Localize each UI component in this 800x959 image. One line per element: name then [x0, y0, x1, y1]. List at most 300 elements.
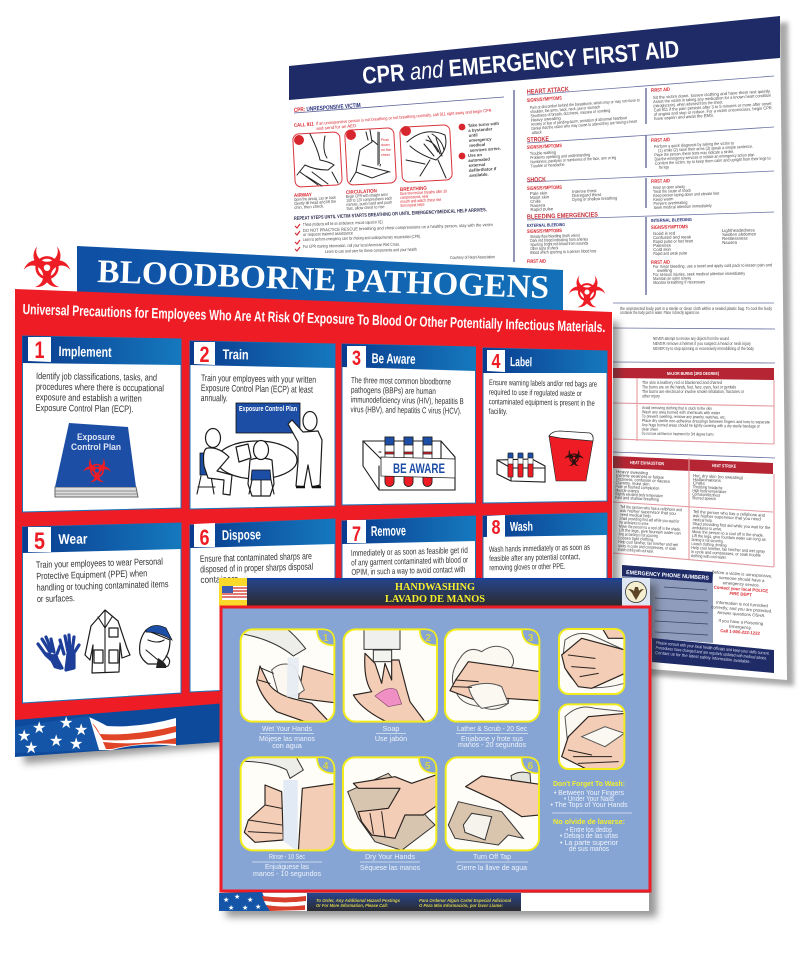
- poster: bloodborne pathogens: [15, 240, 619, 764]
- text: wash: removing gloves or other PPE.: [489, 562, 565, 572]
- table: heat exhaustion and heat stroke: Help cool him/her, fan him/her and wet: [618, 539, 679, 547]
- section: bleeding emergencies: Lightheadedness: [722, 227, 755, 233]
- step 2: soap: [344, 627, 437, 723]
- step captions: 100 to 120 compressions each: [346, 196, 393, 203]
- step captions: AIRWAY: [294, 192, 313, 199]
- table: heat exhaustion and heat stroke: [613, 456, 774, 567]
- section: bleeding emergencies: SIGNS/SYMPTOMS: [651, 224, 689, 231]
- section: heart attack: shoulder, the arms, back, neck, jaw or stomach: [530, 104, 601, 114]
- footer flag: ★: [74, 720, 88, 739]
- section: stroke: Place the person, these tests may indicate a stroke.: [654, 149, 734, 157]
- section: shock: Pale skin: [530, 190, 548, 196]
- text: implement: procedures where there is occupational: [36, 381, 164, 393]
- text: implement: Exposure Control Plan (ECP).: [36, 402, 134, 414]
- footer band: Please consult with your local health officials and keep your skills current.: [656, 640, 770, 656]
- section: stroke: Trouble or headache: [530, 162, 565, 169]
- step captions: CIRCULATION: [346, 188, 377, 196]
- section: stroke: Problems speaking and understanding: [530, 152, 591, 160]
- card 5: wear: Wear: [58, 530, 88, 547]
- captions row 1: con agua: [272, 741, 302, 750]
- icon: training meeting: Exposure Control Plan: [239, 406, 297, 413]
- captions row 1: Mójese las manos: [259, 734, 315, 743]
- captions row 1: [259, 724, 528, 750]
- side image: between the fingers: [559, 627, 626, 694]
- table: heat exhaustion and heat stroke: Loosen clothing, drinking.: [691, 541, 727, 548]
- section: bleeding emergencies: NEVER attempt to remove any objects from the wound: [653, 336, 729, 341]
- table: heat exhaustion and heat stroke: Slightly elevated body temperature: [615, 491, 664, 498]
- section: heart attack: attack: [531, 129, 543, 135]
- section: stroke: Numbness, paralysis or numbness of the face, arm or leg: [530, 155, 617, 164]
- captions row 2: Dry Your Hands: [365, 852, 415, 861]
- emergency notes: someone should have a: [719, 575, 765, 583]
- section: shock: Disregard thirst: [572, 192, 602, 198]
- table: heat exhaustion and heat stroke: trouble clothing with cool water.: [618, 547, 654, 554]
- table: major burns: The skin is leathery red or blackened and charred: [642, 380, 723, 385]
- section: bleeding emergencies: BLEEDING EMERGENCIES: [527, 212, 599, 221]
- card 7: remove: 7: [352, 523, 361, 546]
- section: shock: Seek medical attention immediately: [654, 203, 712, 210]
- icon: US flag on yellow: [219, 578, 247, 606]
- reminder list: • The Tops of Your Hands: [550, 800, 628, 809]
- section: bleeding emergencies: INTERNAL BLEEDING: [651, 217, 693, 223]
- section: stroke: Dial the emergency services or initiate an emergency action plan: [654, 152, 755, 162]
- section: bleeding emergencies: Swollen abdomen: [722, 231, 757, 237]
- card 6: dispose: [190, 519, 335, 692]
- text: label: required to use if regulated waste or: [489, 388, 582, 398]
- section: shock: Keep warm: [653, 196, 674, 202]
- text: wash: feasible after any potential contact,: [489, 552, 580, 563]
- text: be aware: immunodeficiency virus (HIV), hepatitis B: [351, 394, 464, 406]
- captions row 1: Use jabón: [375, 734, 407, 743]
- section: CPR unresponsive victim: [293, 97, 504, 260]
- step 1: wet your hands: [238, 627, 334, 723]
- section: stroke: STROKE: [527, 136, 550, 144]
- text: implement: [36, 370, 164, 415]
- section: heart attack: [527, 86, 773, 135]
- section: bleeding emergencies: Restlessness: [722, 236, 748, 241]
- table: heat exhaustion and heat stroke: Fast and shallow breathing: [615, 495, 660, 502]
- main panel: [221, 607, 650, 891]
- section: heart attack: Pain or discomfort behind the breastbone, which may or may not move to: [530, 97, 640, 110]
- text: remove: [351, 545, 469, 577]
- step 4: rinse: 4: [323, 761, 329, 772]
- reminder list: • Debajo de las uñas: [560, 831, 618, 840]
- repeat steps note: or request trained assistance: [303, 230, 354, 237]
- table: heat exhaustion and heat stroke: Chills: [693, 480, 705, 486]
- emergency notes: correctly, and you are protected.: [711, 604, 772, 614]
- emergency notes: If you have a Poisoning: [718, 618, 764, 626]
- section: bleeding emergencies: the unprotected body part in a sterile or clean cloth within a sealed plastic bag. To cool the body: [620, 306, 773, 311]
- card 4: label: [483, 348, 607, 503]
- card 1: implement: Implement: [58, 343, 112, 360]
- table: heat exhaustion and heat stroke: Confusion/dizziness: [692, 491, 720, 498]
- table: heat exhaustion and heat stroke: Heavy sweating: [616, 469, 649, 475]
- emergency notes: Answer questions OSHA.: [717, 610, 766, 618]
- section: heart attack: Anxiety or fear of pending doom, sensation of abnormal heartbeat: [531, 115, 628, 127]
- icon: face shield: [140, 625, 172, 668]
- emergency notes: [709, 569, 773, 637]
- footer flag: ★: [49, 731, 63, 750]
- text: remove: OPIM, in such a way to avoid contact with: [351, 564, 466, 577]
- reminder list: • La parte superior: [560, 838, 619, 847]
- icon: lab coat: [85, 610, 130, 673]
- icon: sharps container: [549, 431, 593, 481]
- right side notes: external: [468, 162, 485, 168]
- repeat steps note: REPEAT STEPS UNTIL VICTIM STARTS BREATHING OR UNTIL EMERGENCY/MEDICAL HELP ARRIVES.: [294, 207, 487, 222]
- repeat steps note: [294, 207, 495, 260]
- section: heart attack: Sit the victim down, loosen clothing and have them rest quietly.: [653, 88, 771, 100]
- section: stroke: Perform a quick diagnosis by asking the victim to: [654, 140, 734, 149]
- section: bleeding emergencies: Other signs of shock: [530, 245, 559, 251]
- section: bleeding emergencies: Paleness: [653, 243, 671, 248]
- table: heat exhaustion and heat stroke: ask his/her supervisor that you need: [693, 513, 762, 522]
- step 3: lather and scrub: [445, 629, 540, 722]
- table: heat exhaustion and heat stroke: spray in cycle and compresses, or soak: [618, 543, 677, 551]
- repeat steps note: Learn to perform emergency care for choking and cardiopulmonary resuscitation (CPR).: [303, 234, 421, 242]
- card 1: implement: 1: [34, 337, 44, 364]
- section: stroke: [527, 136, 771, 170]
- footer: O Para Más Información, por favor Llame:: [419, 903, 504, 908]
- table: heat exhaustion and heat stroke: need medical help.: [620, 512, 652, 518]
- emergency phone numbers box: EMERGENCY PHONE NUMBERS: [626, 570, 709, 582]
- right side notes: services arrive.: [469, 146, 501, 153]
- title: HANDWASHING: [395, 581, 475, 593]
- emergency notes: Information is not furnished: [716, 600, 769, 608]
- step captions: chin, then check.: [294, 203, 324, 210]
- table: major burns: Place dry sterile non-adhesive dressings between fingers and toes to separate: [642, 418, 770, 424]
- section: bleeding emergencies: NEVER try to stop spinning or excessively immobilizing of the body: [653, 346, 755, 351]
- table: major burns: Any huge burned areas should be lightly covering with a dry sterile bandage or: [642, 422, 760, 429]
- text: train: Train your employees with your written: [201, 372, 316, 385]
- footer: To Order, Any Additional Hazard Postings: [316, 898, 401, 903]
- section: shock: Prevent overheating: [653, 200, 688, 206]
- table: heat exhaustion and heat stroke: Pale or flushed complexion: [615, 484, 660, 491]
- section: heart attack: have aspirin and await the EMS.: [654, 113, 714, 121]
- card 5: wear: [22, 523, 181, 703]
- section: shock: Rapid pulse: [530, 206, 554, 212]
- step 3: lather and scrub: 3: [528, 633, 534, 644]
- section: shock: Moist skin: [530, 194, 550, 200]
- footer: ★: [242, 904, 248, 912]
- step captions: Gently tilt head and lift the: [294, 199, 337, 206]
- footer flag: ★: [59, 713, 73, 732]
- table: heat exhaustion and heat stroke: Move the person to a cool off in the shade.: [619, 523, 681, 532]
- right side notes: a bystander: [468, 126, 493, 133]
- section: bleeding emergencies: Dark red blood indicating from arteries: [530, 236, 588, 243]
- title band: [289, 16, 780, 100]
- text: train: Exposure Control Plan (ECP) at least: [201, 382, 313, 395]
- section: heart attack: HEART ATTACK: [527, 86, 569, 96]
- emergency notes: Contact your local POLICE: [714, 585, 769, 593]
- captions row 1: Enjabone y frote sus: [461, 734, 523, 743]
- section: CPR unresponsive victim: If an unresponsive person is not breathing or not breathing normally, call 911 right away and begin CPR: [316, 108, 492, 126]
- table: heat exhaustion and heat stroke: Dizziness, confusion or nausea: [616, 476, 670, 484]
- text: label: Ensure warning labels and/or red bags are: [489, 378, 597, 389]
- step 6: turn off tap: [446, 757, 540, 850]
- section: stroke: Trouble walking: [530, 150, 557, 156]
- section: bleeding emergencies: Cold skin: [653, 247, 672, 252]
- footer flag: ★: [69, 734, 83, 753]
- text: dispose: containers.: [200, 573, 241, 585]
- section: CPR unresponsive victim: CALL 911: [294, 121, 314, 129]
- table: heat exhaustion and heat stroke: Slurred speech: [692, 495, 717, 501]
- section: CPR unresponsive victim: and send for an AED: [316, 123, 356, 131]
- section: shock: Keep an open airway: [653, 184, 686, 190]
- top band: [219, 578, 650, 606]
- card 6: dispose: Dispose: [222, 526, 261, 543]
- section: bleeding emergencies: SIGNS/SYMPTOMS: [527, 228, 563, 235]
- right side notes: Take turns with: [468, 121, 500, 128]
- footer band: Procedures have changed and are regularly updated with medical advice.: [655, 645, 767, 661]
- red panel: [15, 289, 612, 721]
- reminder list: de sus manos: [569, 844, 609, 853]
- section: stroke: Comfort the victim, try to keep them calm and upright from their legs to: [655, 156, 771, 166]
- footer flag: [15, 672, 612, 757]
- section: bleeding emergencies: Monitor breathing if necessary: [653, 279, 706, 285]
- section: heart attack: Denial that the victim who may cause to attend they are having a heart: [531, 119, 638, 131]
- section: heart attack: FIRST AID: [651, 87, 670, 94]
- card 3: be aware: [342, 344, 476, 505]
- table: major burns: MAJOR BURNS (3RD DEGREE): [667, 371, 719, 376]
- section: shock: FIRST AID: [651, 178, 670, 185]
- text: be aware: The three most common bloodborne: [351, 375, 451, 387]
- text: dispose: [200, 550, 314, 585]
- table: heat exhaustion and heat stroke: Hot, dry skin (no sweating): [693, 473, 744, 480]
- text: wear: handling or touching contaminated items: [36, 578, 169, 593]
- section: shock: Nausea: [530, 202, 546, 208]
- reminder list: • Under Your Nails: [564, 794, 614, 803]
- table: heat exhaustion and heat stroke: Shad providing first aid while you wait for the: [692, 521, 771, 530]
- section: heart attack: (nitroglycerin), when advised from the sheet.: [653, 99, 723, 108]
- table: heat exhaustion and heat stroke: Lift the legs, give fountain water can long as: [692, 533, 766, 542]
- CPR step panels: Push: [381, 138, 389, 142]
- section: bleeding emergencies: FIRST AID: [527, 259, 546, 265]
- emergency notes: Call 1-800-222-1222: [720, 628, 761, 636]
- table: heat exhaustion and heat stroke: Hallucinations: [693, 477, 721, 483]
- section: bleeding emergencies: [527, 212, 773, 351]
- reminder list: • Entre los dedos: [566, 825, 612, 834]
- card 8: wash: [483, 513, 607, 600]
- card 2: train: 2: [200, 342, 210, 367]
- section: shock: Intense thirst: [572, 188, 597, 194]
- section: bleeding emergencies: EXTERNAL BLEEDING: [527, 222, 565, 228]
- icon: exposure control plan book: [55, 423, 138, 497]
- title: CPR and EMERGENCY FIRST AID: [361, 36, 680, 90]
- section: bleeding emergencies: Steady flow bleeding (both veins): [530, 233, 580, 239]
- card 6: dispose: 6: [200, 525, 210, 550]
- table: heat exhaustion and heat stroke: Muscle cramps: [615, 487, 639, 494]
- top band: LAVADO DE MANOS: [385, 593, 485, 605]
- icon: seal: [622, 578, 650, 606]
- captions row 2: [252, 852, 528, 878]
- section: stroke: SIGNS/SYMPTOMS: [527, 143, 563, 151]
- section: shock: [527, 176, 720, 212]
- table: heat exhaustion and heat stroke: Help cool him/her, fan him/her and wet spray: [691, 545, 766, 554]
- table: major burns: other injury: [642, 394, 661, 398]
- repeat steps note: Learn to use and care for these components and your health: [325, 247, 417, 254]
- card 7: remove: Remove: [371, 522, 406, 539]
- captions row 2: manos - 10 segundos: [253, 869, 321, 878]
- section: bleeding emergencies: Rapid pulse or fast heart: [653, 238, 694, 244]
- table: major burns: The burns are electrical or involve smoke inhalation, fractures or: [642, 389, 744, 394]
- emergency notes: Before a victim is unresponsive,: [712, 569, 772, 579]
- table: major burns: The burns are on the hands, feet, face, eyes, feet or genitals: [642, 384, 736, 390]
- right side notes: Use an: [468, 152, 483, 158]
- table: heat exhaustion and heat stroke: ask his/her supervisor that you: [620, 508, 677, 516]
- table: heat exhaustion and heat stroke: ambulance to arrive.: [692, 525, 722, 532]
- section: shock: SHOCK: [527, 176, 546, 184]
- table: heat exhaustion and heat stroke: Tell the person who has a cellphone and: [693, 509, 766, 518]
- reminder list: Don't Forget To Wash:: [553, 779, 625, 788]
- section: heart attack: SIGNS/SYMPTOMS: [527, 96, 563, 104]
- footer: [219, 892, 649, 912]
- column dividers: [514, 88, 646, 295]
- text: wash: Wash hands immediately or as soon as: [489, 543, 590, 554]
- section: bleeding emergencies: Good is red: [653, 231, 676, 236]
- footer band: [652, 638, 774, 673]
- icon: test tube rack: BE AWARE: [393, 460, 445, 476]
- table: major burns: Avoid removing clothing that is stuck to the skin: [642, 405, 713, 411]
- table: major burns: [613, 368, 774, 444]
- step captions: Give two rescue breaths after 30: [400, 189, 447, 196]
- card 1: implement: [22, 336, 181, 512]
- section: heart attack: Heavy sweating: [531, 115, 561, 123]
- poster: handwashing: [219, 578, 657, 917]
- text: be aware: pathogens (BBPs) are human: [351, 385, 436, 396]
- card 3: be aware: Be Aware: [371, 350, 416, 367]
- section: bleeding emergencies: swelling: [657, 268, 673, 273]
- captions row 1: Soap: [383, 724, 399, 733]
- illustrations row 2: [238, 755, 540, 852]
- section: stroke: the legs: [659, 164, 669, 170]
- table: heat exhaustion and heat stroke: fainting is not occurring.: [691, 537, 724, 544]
- text: wear: or surfaces.: [37, 592, 75, 604]
- section: shock: Dying or shallow breathing: [572, 195, 618, 202]
- card 2: train: [190, 341, 335, 509]
- section: shock: Treat the cause of shock: [653, 188, 692, 194]
- poster: CPR and emergency first aid: [289, 16, 794, 686]
- card 5: wear: 5: [34, 528, 45, 555]
- text: remove: Immediately or as soon as feasible get rid: [351, 545, 468, 558]
- table: heat exhaustion and heat stroke: Shad providing first aid while you wait for: [619, 516, 680, 524]
- text: wear: Train your employees to wear Personal: [36, 555, 163, 570]
- section: heart attack: Call 911 if the pain persists after 3 to 5 minutes or more after onset: [653, 101, 772, 113]
- right side notes: [459, 121, 501, 178]
- icon: test tube rack: [363, 437, 455, 490]
- section: heart attack: Shortness of breath, dizziness, nausea or vomiting: [530, 108, 611, 118]
- section: shock: SIGNS/SYMPTOMS: [527, 185, 563, 192]
- icon: training meeting: [197, 403, 322, 496]
- CPR step panels: down: [381, 143, 390, 147]
- captions row 1: manos - 20 segundos: [458, 740, 526, 749]
- repeat steps note: Courtesy of Heart Association: [450, 254, 495, 260]
- emergency phone numbers box: [622, 565, 713, 643]
- table: heat exhaustion and heat stroke: Loosen tight clothing.: [618, 535, 655, 542]
- reminder list: • Between Your Fingers: [554, 788, 624, 797]
- icon: biohazard left: [22, 240, 72, 287]
- captions row 2: Turn Off Tap: [473, 852, 511, 861]
- section: CPR unresponsive victim: CPR: UNRESPONSIVE VICTIM: [294, 103, 361, 114]
- icon: exposure control plan book: Exposure: [77, 432, 115, 442]
- card 8: wash: 8: [492, 517, 500, 539]
- emergency notes: FIRE DEPT: [729, 591, 752, 597]
- icon: biohazard right: [567, 271, 607, 307]
- section: bleeding emergencies: Nausea: [722, 240, 738, 245]
- footer: ★: [247, 896, 253, 904]
- section: bleeding emergencies: Spurting bright red blood from wounds: [530, 240, 588, 247]
- step 6: turn off tap: 6: [528, 761, 534, 772]
- footer: ★: [228, 904, 234, 912]
- section: bleeding emergencies: For serious injuries, seek medical attention immediately: [653, 271, 746, 277]
- icon: gloves: [38, 635, 79, 670]
- table: major burns: Wash any area burned with chemicals with water: [642, 409, 720, 415]
- text: wash: [489, 543, 590, 572]
- table: major burns: clean sheet: [642, 426, 658, 432]
- captions row 2: Rinse - 10 Sec: [269, 852, 305, 861]
- card 4: label: 4: [492, 351, 501, 373]
- section: bleeding emergencies: For minor bleeding, use a towel and apply cold pack to lessen pain and: [653, 262, 773, 269]
- step 4: rinse: [238, 755, 335, 852]
- captions row 2: Enjuáguese las: [265, 862, 309, 871]
- table: heat exhaustion and heat stroke: clothing with cool water.: [691, 553, 727, 560]
- step captions: compressions, seal: [400, 194, 428, 200]
- table: heat exhaustion and heat stroke: HEAT EXHAUSTION: [630, 460, 665, 466]
- icon: exposure control plan book: Control Plan: [71, 442, 121, 452]
- step 2: soap: 2: [426, 633, 432, 644]
- step captions: mouth and watch chest rise: [400, 197, 442, 204]
- illustrations row 1: [238, 627, 626, 770]
- footer: ★: [255, 903, 261, 911]
- section: bleeding emergencies: container the body part in water. Place it directly against ice.: [620, 310, 700, 315]
- section: bleeding emergencies: Blood which spurting to a person blood loss: [530, 248, 596, 255]
- captions row 1: Wet Your Hands: [262, 724, 312, 733]
- text: implement: Identify job classifications, tasks, and: [36, 370, 157, 383]
- text: remove: of any garment contaminated with blood or: [351, 554, 468, 567]
- footer: ★: [223, 896, 229, 904]
- section rules: [527, 76, 775, 458]
- repeat steps note: These products will be an ambulance, rescue squad or 911: [303, 219, 383, 227]
- emergency notes: emergency service.: [723, 580, 760, 588]
- card 2: train: Train: [222, 346, 249, 362]
- section: heart attack: Assist the victim in taking any medication for a known heart condition: [653, 93, 772, 104]
- reminder list: No olvide de lavarse:: [553, 817, 625, 826]
- text: dispose: Ensure that contaminated sharps are: [200, 550, 312, 564]
- text: label: contaminated equipment is present in the: [489, 397, 595, 408]
- table: heat exhaustion and heat stroke: long as fainting is not occurring.: [619, 531, 659, 538]
- right side notes: automated: [468, 156, 490, 163]
- section: heart attack: of angina and stop or reduce. For a victim unconscious, begin CPR: [654, 105, 772, 117]
- card 3: be aware: 3: [352, 347, 361, 370]
- step 5: dry your hands: 5: [425, 761, 431, 772]
- text: be aware: [351, 375, 464, 416]
- section: shock: Chills: [530, 199, 541, 204]
- text: label: [489, 378, 597, 417]
- footer: Or For More Information, Please Call:: [316, 903, 389, 908]
- footer band: Contact us for the latest safety information available.: [655, 650, 751, 664]
- right side notes: until: [468, 132, 478, 138]
- right side notes: defibrillator if: [469, 166, 497, 173]
- table: major burns: Do not use ointment or treatment for 3rd degree burns: [642, 431, 714, 437]
- section: stroke: (1) smile (2) raise their arms (3) speak a simple sentence.: [658, 144, 753, 153]
- table: heat exhaustion and heat stroke: Clammy, moist skin: [615, 480, 650, 487]
- step captions: Open the airway. Lay on back: [294, 195, 337, 202]
- captions row 2: Séquese las manos: [360, 863, 420, 872]
- table: heat exhaustion and heat stroke: HEAT STROKE: [712, 463, 736, 469]
- section: stroke: FIRST AID: [651, 137, 670, 144]
- step captions: minute, push hard and push: [346, 200, 393, 207]
- text: label: facility.: [489, 407, 508, 416]
- step captions: BREATHING: [400, 186, 427, 193]
